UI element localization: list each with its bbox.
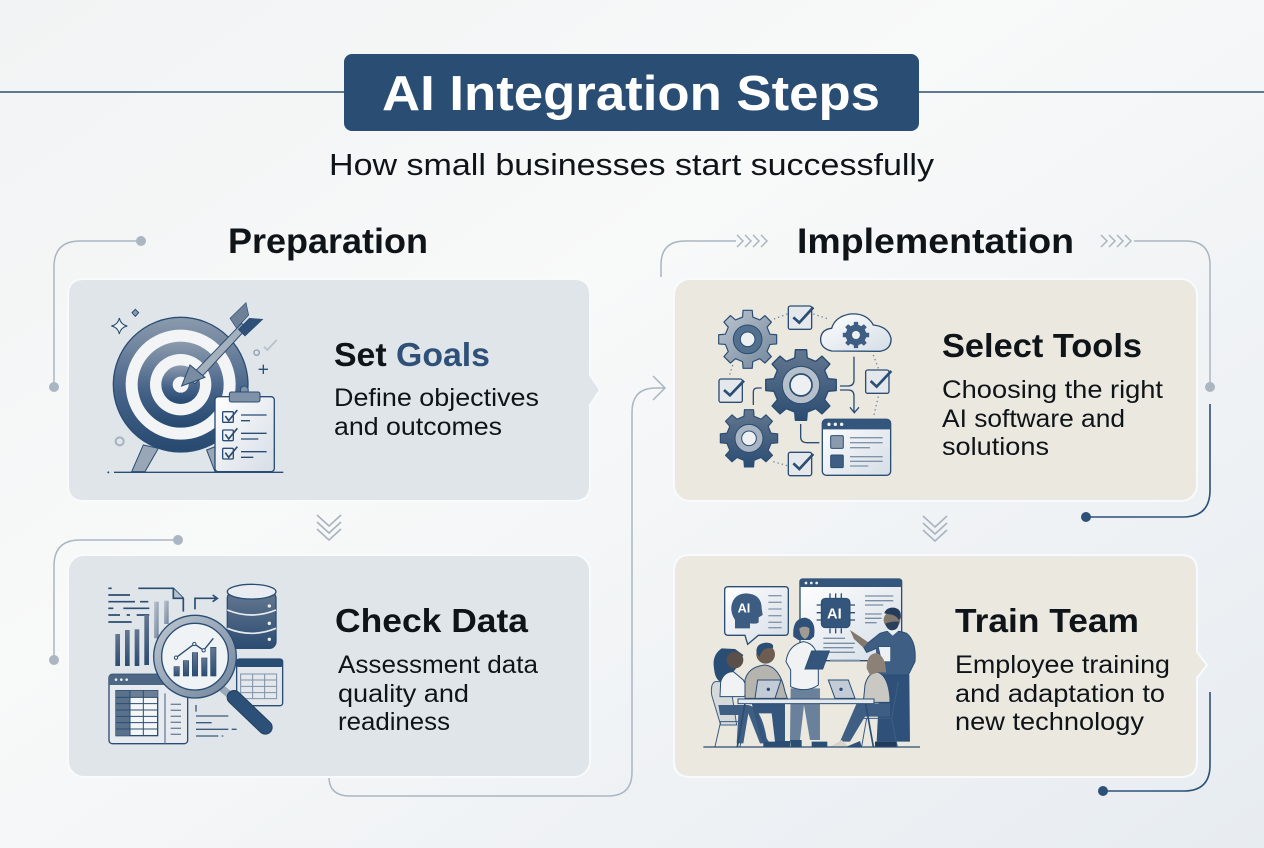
text: train team: new technology	[955, 708, 1145, 736]
connector: implementation top left with chevrons	[661, 235, 767, 277]
chairs	[715, 682, 898, 747]
person: seated man	[745, 643, 790, 747]
heading: Preparation: Preparation	[228, 222, 428, 261]
text: select tools: Select Tools	[942, 327, 1142, 364]
connector: preparation lower	[49, 535, 183, 665]
text: train team: Train Team	[955, 602, 1139, 639]
gear center	[766, 350, 836, 420]
text: set goals: Set Goals	[334, 336, 490, 373]
text: select tools: solutions	[942, 433, 1049, 461]
gear top left	[719, 310, 777, 368]
chevrons: implementation down	[923, 516, 947, 541]
title rule	[0, 91, 1264, 93]
text: select tools	[942, 327, 1163, 461]
text: check data: Assessment data	[338, 651, 538, 679]
table	[737, 699, 874, 747]
panel: select tools	[674, 279, 1197, 501]
panel: set goals	[68, 279, 600, 501]
person: seated woman left	[711, 648, 770, 743]
icon: data review with magnifier	[108, 584, 283, 744]
chevrons: preparation down	[317, 515, 341, 540]
connector: train team dark line	[1098, 692, 1210, 796]
text: check data: quality and	[338, 680, 469, 708]
text: set goals	[334, 336, 539, 441]
text: check data: readiness	[338, 708, 450, 736]
text: select tools: AI software and	[942, 405, 1125, 433]
connector: preparation to implementation arrow	[329, 376, 665, 796]
text: set goals: and outcomes	[334, 413, 502, 441]
icon: target with arrow and checklist	[107, 303, 283, 473]
person: standing woman center	[786, 618, 829, 747]
heading: Implementation: Implementation	[797, 222, 1074, 261]
panel: check data	[68, 555, 590, 777]
connector: select tools dark line	[1081, 404, 1210, 522]
subtitle: How small businesses start successfully	[329, 147, 935, 182]
text: train team	[955, 602, 1170, 736]
title banner: AI Integration Steps	[382, 67, 880, 121]
icon: gears, cloud and software window	[719, 306, 891, 476]
text: select tools: Choosing the right	[942, 376, 1163, 404]
icon: team training around a table: AI	[827, 606, 842, 622]
gear bottom left	[720, 410, 778, 467]
icon: team training around a table: AI	[738, 601, 750, 615]
connector: preparation top	[49, 236, 146, 392]
laptops	[755, 680, 855, 698]
person: seated woman right	[830, 653, 890, 747]
text: train team: Employee training	[955, 651, 1170, 679]
text: set goals: Define objectives	[334, 384, 539, 412]
panel: train team	[674, 555, 1207, 777]
text: train team: and adaptation to	[955, 680, 1165, 708]
person: standing presenter right	[850, 608, 915, 747]
title banner	[344, 54, 919, 131]
text: check data: Check Data	[335, 602, 529, 639]
connector: implementation top right with chevrons	[1101, 235, 1215, 392]
icon: team training around a table	[703, 579, 920, 747]
text: check data	[335, 602, 538, 736]
